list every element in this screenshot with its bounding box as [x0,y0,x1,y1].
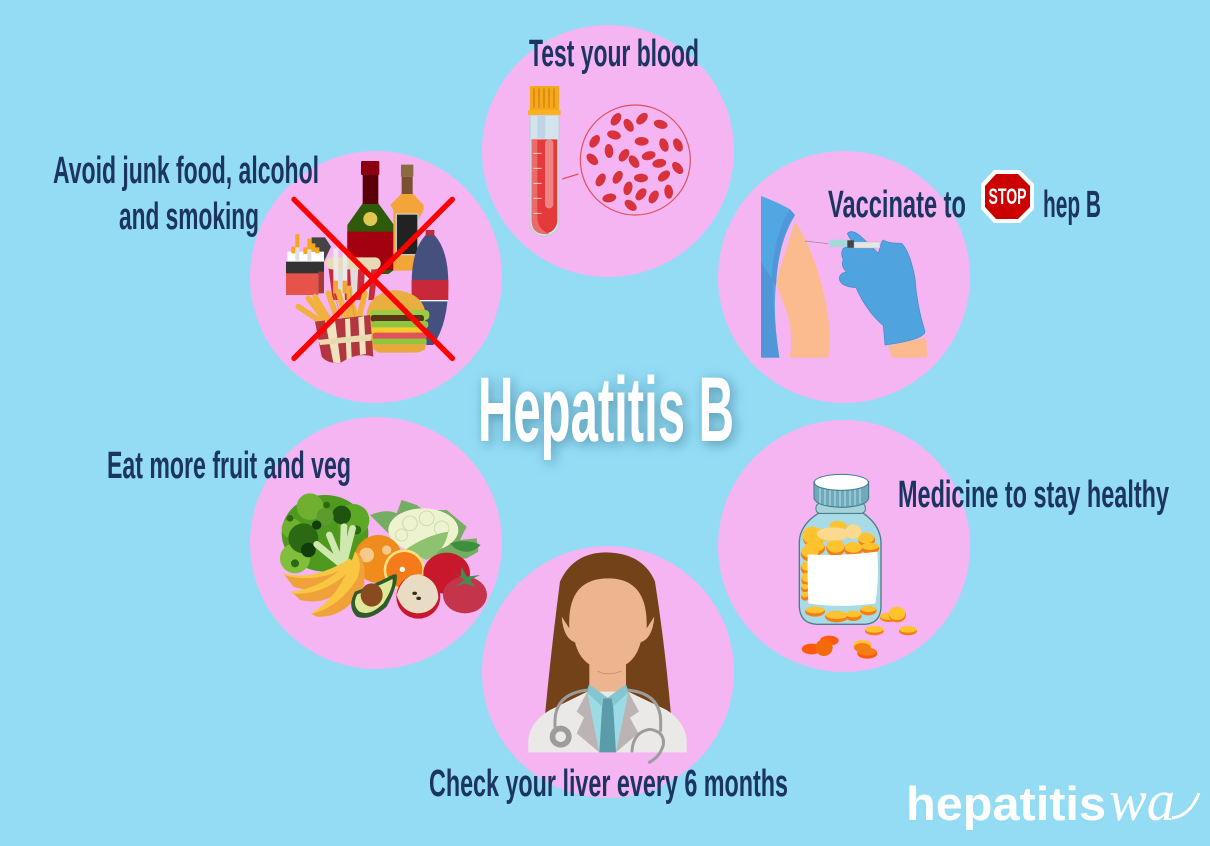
label: avoid junk food, alcohol: Avoid junk food, alcohol [53,150,319,192]
logo: hepatitis wa [906,768,1199,833]
panel: medicine [718,420,1169,672]
label: eat more fruit and veg: Eat more fruit and veg [107,445,351,487]
circle: check your liver [482,546,734,798]
circle: avoid junk food [250,151,502,403]
circle: fruit and veg [250,417,502,669]
label: hep B: hep B [1043,184,1101,226]
panel: check your liver [429,546,788,805]
icon: junk food crossed out [286,161,452,363]
icon: blood test tube and cells [528,86,690,236]
panel: vaccinate [718,151,1101,403]
circle: test your blood [482,25,734,277]
icon: doctor [528,552,687,762]
logo: hepatitis wa: hepatitis [906,777,1106,830]
panel: test your blood [482,25,734,277]
label: test your blood: Test your blood [529,33,699,75]
icon: stop sign: STOP [988,184,1026,209]
circle: medicine [718,420,970,672]
panel: fruit and veg [107,417,502,669]
label: vaccinate to: Vaccinate to [828,184,966,226]
title: Hepatitis B: Hepatitis B [478,359,734,461]
circle: vaccinate [718,151,970,403]
logo: hepatitis wa: wa [1109,768,1175,833]
panel: avoid junk food [53,150,502,403]
label: check your liver: Check your liver every 6 months [429,763,788,805]
icon: fruit and vegetables [280,493,487,619]
icon: pill bottle [799,474,917,659]
icon: arm receiving injection [761,196,927,358]
label: and smoking: and smoking [119,196,259,238]
icon: stop sign [981,170,1034,223]
